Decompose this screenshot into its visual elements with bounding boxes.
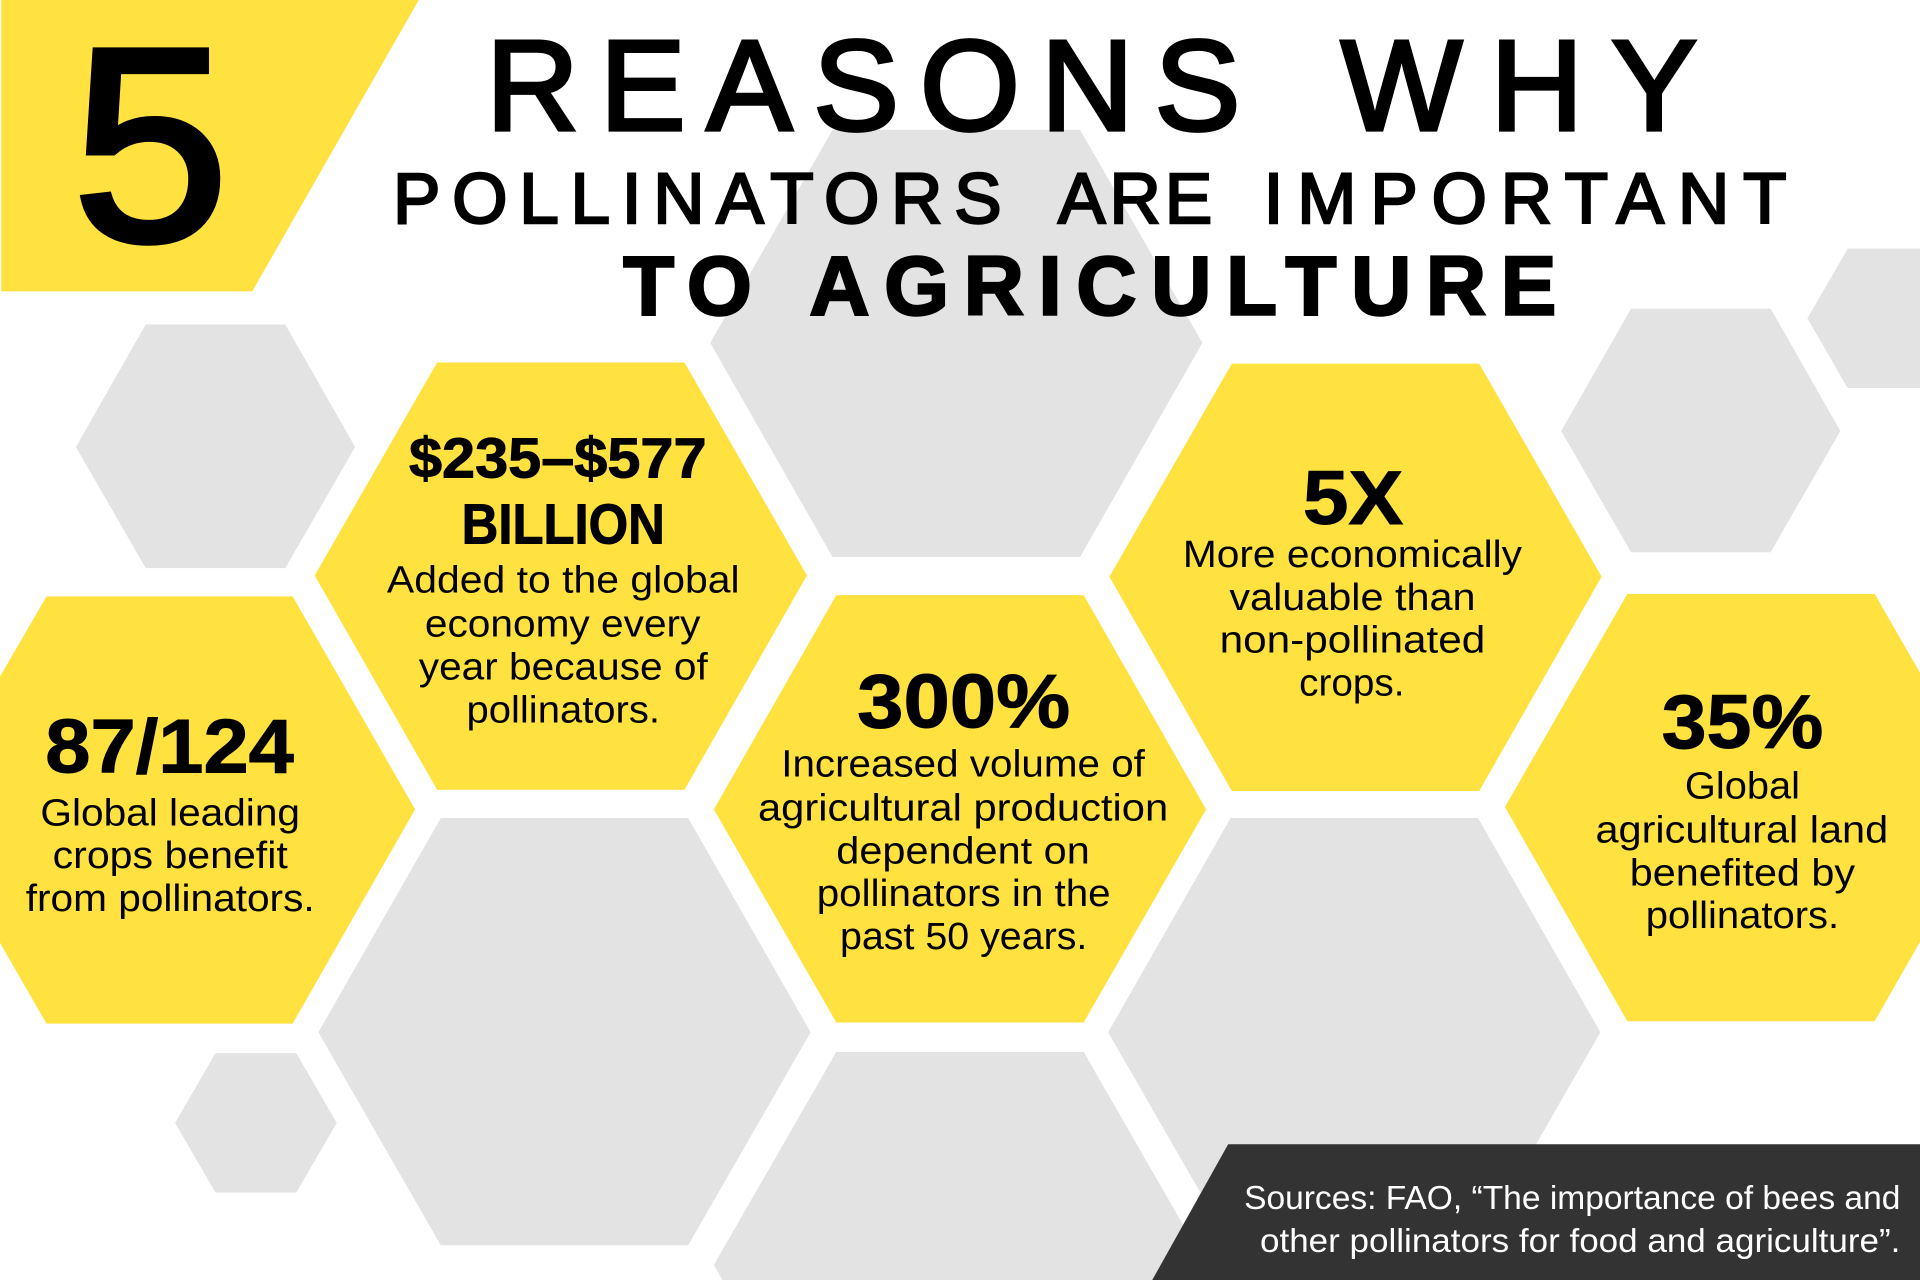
panel: $235-$577 billion: Added to the global bbox=[387, 560, 740, 602]
background hexagon: bottom center gray bbox=[714, 1052, 1206, 1280]
background hexagon: right gray bbox=[1561, 309, 1840, 552]
background hexagon: far right gray bbox=[1807, 249, 1920, 388]
panel: 300% bbox=[714, 595, 1206, 1022]
panel: $235-$577 billion: economy every bbox=[425, 604, 700, 646]
panel: 87/124 crops bbox=[0, 596, 415, 1024]
panel: 300%: pollinators in the bbox=[817, 873, 1111, 915]
number badge bbox=[1, 0, 419, 299]
sources banner bbox=[1152, 1144, 1920, 1280]
background hexagon: lower right gray bbox=[1108, 818, 1600, 1245]
panel: 87/124 crops: Global leading bbox=[40, 792, 300, 834]
panel: 5X: valuable than bbox=[1229, 577, 1476, 619]
panel: 5X: More economically bbox=[1183, 534, 1522, 576]
title: ARE bbox=[1058, 160, 1212, 239]
number badge: 5 bbox=[72, 0, 229, 299]
title bbox=[393, 15, 1787, 333]
panel: 300%: dependent on bbox=[836, 830, 1090, 872]
background hexagon: small gray bbox=[175, 1053, 337, 1193]
background hexagon: left gray bbox=[76, 324, 355, 568]
panel: 35%: Global bbox=[1685, 765, 1800, 807]
panel: 300%: past 50 years. bbox=[840, 916, 1087, 958]
title: WHY bbox=[1341, 15, 1697, 158]
panel: 5X: non-pollinated bbox=[1220, 620, 1485, 662]
panel: $235-$577 billion: year because of bbox=[419, 647, 708, 689]
panel: 300%: agricultural production bbox=[758, 787, 1168, 829]
panel: $235-$577 billion: BILLION bbox=[462, 493, 665, 556]
title: TO bbox=[623, 240, 752, 333]
title: IMPORTANT bbox=[1264, 160, 1787, 239]
background hexagon: top center gray bbox=[710, 130, 1202, 557]
panel: $235-$577 billion bbox=[315, 362, 807, 790]
panel: 87/124 crops: 87/124 bbox=[45, 705, 294, 790]
panel: 35%: 35% bbox=[1662, 680, 1823, 765]
panel: 300%: Increased volume of bbox=[781, 743, 1145, 785]
title: AGRICULTURE bbox=[809, 240, 1556, 333]
background hexagon: lower left gray bbox=[318, 818, 811, 1245]
title: REASONS bbox=[486, 15, 1240, 158]
panel: 5X: crops. bbox=[1299, 663, 1404, 705]
title: POLLINATORS bbox=[393, 160, 1002, 239]
panel: 35% bbox=[1505, 594, 1920, 1021]
panel: 5X: 5X bbox=[1303, 456, 1403, 541]
panel: 35%: pollinators. bbox=[1646, 895, 1839, 937]
panel: 35%: benefited by bbox=[1630, 852, 1855, 894]
panel: $235-$577 billion: pollinators. bbox=[467, 689, 660, 731]
panel: 87/124 crops: from pollinators. bbox=[26, 878, 315, 920]
panel: 300%: 300% bbox=[857, 659, 1070, 744]
panel: 87/124 crops: crops benefit bbox=[53, 835, 288, 877]
panel: 5X bbox=[1109, 364, 1602, 791]
sources banner: Sources: FAO, “The importance of bees and bbox=[1244, 1180, 1900, 1217]
sources banner: other pollinators for food and agriculture”. bbox=[1260, 1223, 1900, 1260]
panel: $235-$577 billion: $235–$577 bbox=[409, 427, 707, 490]
panel: 35%: agricultural land bbox=[1596, 809, 1888, 851]
